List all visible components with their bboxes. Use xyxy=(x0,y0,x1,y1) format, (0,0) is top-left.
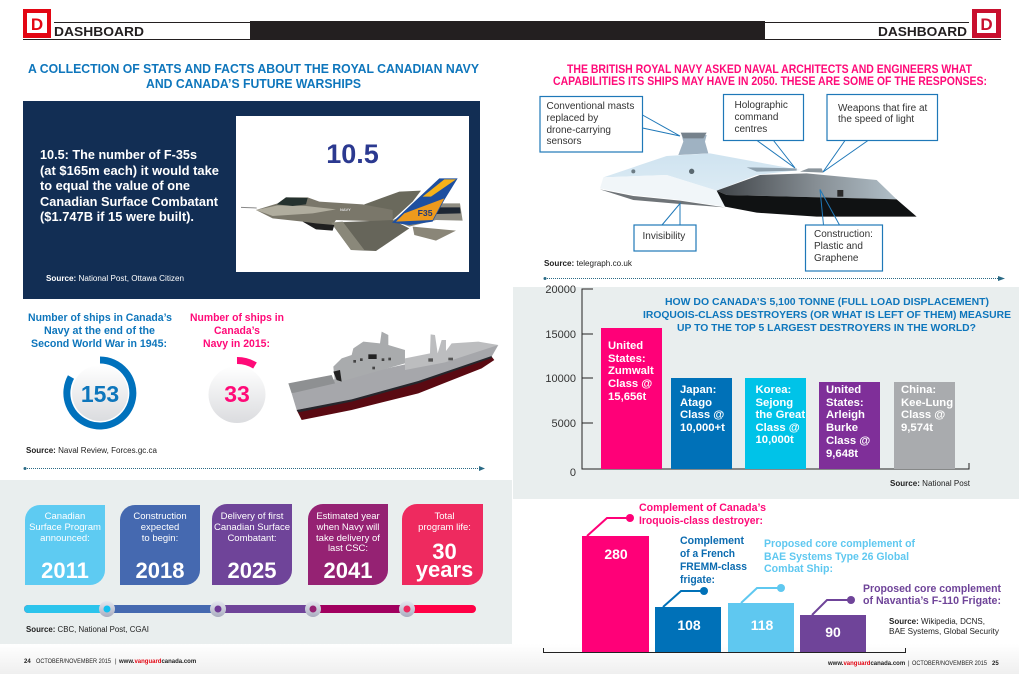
card: 2018 xyxy=(120,505,200,585)
panel: program timeline xyxy=(0,480,512,644)
bar: Atago: Class @ xyxy=(680,409,724,421)
bar: Arleigh Burke: Arleigh xyxy=(826,409,865,421)
callout: weapons: the speed of light xyxy=(838,114,914,125)
card: 30 years: Total xyxy=(434,511,455,522)
chart axes: 5000 xyxy=(552,418,576,430)
bar: Arleigh Burke xyxy=(819,382,880,469)
bar: Zumwalt xyxy=(601,328,662,469)
bar: Type 26 118: Combat Ship: xyxy=(764,563,833,575)
callout: holographic: centres xyxy=(734,124,767,135)
panel: destroyer chart xyxy=(513,284,1019,499)
card: 2011 xyxy=(25,505,105,585)
card: 2041: 2041 xyxy=(324,558,372,583)
arrow: left dotted divider xyxy=(24,466,485,471)
callout: masts: sensors xyxy=(546,136,582,147)
footer right: 25 xyxy=(992,661,999,667)
bar: Iroquois 280: Complement of Canada’s xyxy=(639,502,766,514)
chart heading: UP TO THE TOP 5 LARGEST DESTROYERS IN THE WORLD? xyxy=(677,322,976,334)
callout: weapons xyxy=(823,94,938,172)
bar: Atago: Atago xyxy=(680,397,712,409)
callout: masts: Conventional masts xyxy=(546,101,634,112)
bar: FREMM 108: of a French xyxy=(680,548,735,560)
left header xyxy=(23,9,250,40)
callout: invisibility: Invisibility xyxy=(642,231,685,242)
right title: CAPABILITIES ITS SHIPS MAY HAVE IN 2050. THESE ARE SOME OF THE RESPONSES: xyxy=(553,76,987,88)
card: 2025: 2025 xyxy=(228,558,276,583)
chart heading: IROQUOIS-CLASS DESTROYERS (OR WHAT IS LEFT OF THEM) MEASURE xyxy=(643,309,1011,321)
ring chart 153 xyxy=(67,360,133,426)
dashboard label left: DASHBOARD xyxy=(54,24,144,39)
bar: Sejong: 10,000t xyxy=(756,434,794,446)
footer left: vanguardcanada.com xyxy=(134,659,196,665)
bar: Atago: 10,000+t xyxy=(680,422,725,434)
chart axes: 20000 xyxy=(545,284,576,296)
callout: holographic xyxy=(724,94,804,168)
chart heading: HOW DO CANADA’S 5,100 TONNE (FULL LOAD DISPLACEMENT) xyxy=(665,296,989,308)
bar: Arleigh Burke: States: xyxy=(826,397,864,409)
bar: Atago: Japan: xyxy=(680,384,716,396)
footer left: | xyxy=(115,659,117,665)
icon: naval supply ship xyxy=(288,332,498,420)
bar: Type 26 118: BAE Systems Type 26 Global xyxy=(764,551,909,563)
card: 2011: announced: xyxy=(40,533,90,544)
callout: masts: replaced by xyxy=(546,113,598,124)
source: Source: CBC, National Post, CGAI xyxy=(26,625,149,634)
icon: F-35 jet: NAVY xyxy=(340,207,351,212)
source: Source: Naval Review, Forces.gc.ca xyxy=(26,446,158,455)
card: 2018: to begin: xyxy=(142,533,178,544)
stat heading: Number of ships in xyxy=(190,312,284,324)
icon: F-35 jet xyxy=(241,178,463,251)
footer left: OCTOBER/NOVEMBER 2015 xyxy=(36,659,112,665)
bar: Sejong: Korea: xyxy=(756,384,791,396)
bar: Arleigh Burke: Burke xyxy=(826,422,858,434)
fact text: to equal the value of one xyxy=(40,179,190,193)
card: 2018: expected xyxy=(141,522,179,533)
bar: FREMM 108: FREMM-class xyxy=(680,561,747,573)
baseline axis xyxy=(544,648,906,652)
bar: Zumwalt: Class @ xyxy=(608,378,652,390)
footer left: www. xyxy=(118,659,135,665)
stat heading: Navy at the end of the xyxy=(44,325,155,337)
callout: construction: Plastic and xyxy=(814,241,863,252)
stat heading: Second World War in 1945: xyxy=(31,338,167,350)
source: Source: telegraph.co.uk xyxy=(544,259,633,268)
stat: ships in 2015 xyxy=(190,312,284,423)
bar: Arleigh Burke: United xyxy=(826,384,861,396)
chart axes: 0 xyxy=(570,467,576,479)
black header bar xyxy=(250,21,765,40)
card: 2025: Delivery of first xyxy=(221,511,284,522)
stat heading: Canada’s xyxy=(214,325,260,337)
callout: masts: drone-carrying xyxy=(546,125,611,136)
icon: D logo right: D xyxy=(980,15,993,34)
icon: futuristic warship xyxy=(600,133,917,217)
bar: Type 26 118 xyxy=(728,538,915,652)
right header xyxy=(765,9,1001,40)
chart axes: 10000 xyxy=(545,373,576,385)
fact text xyxy=(40,148,219,224)
source: Source: Wikipedia, DCNS, xyxy=(889,617,985,626)
bar: Sejong: Sejong xyxy=(756,397,793,409)
card: 30 years xyxy=(402,504,483,585)
bar: Iroquois 280: 280 xyxy=(604,546,628,562)
footer right: OCTOBER/NOVEMBER 2015 xyxy=(912,661,988,667)
bar: Atago xyxy=(671,378,732,469)
callout: masts xyxy=(540,96,680,152)
stat heading xyxy=(28,312,172,350)
callout: construction: Graphene xyxy=(814,253,859,264)
bar: F-110 90: of Navantia’s F-110 Frigate: xyxy=(863,595,1001,607)
icon: D logo left: D xyxy=(31,15,43,34)
footer shading xyxy=(0,644,1019,674)
card: 2041 xyxy=(308,504,388,585)
bar: Iroquois 280: Iroquois-class destroyer: xyxy=(639,515,763,527)
bar: Sejong xyxy=(745,378,806,469)
footer right: www.vanguardcanada.com xyxy=(828,661,905,667)
card: 30 years: 30 xyxy=(432,539,457,564)
bar: Type 26 118: 118 xyxy=(751,617,774,633)
bar: Zumwalt: States: xyxy=(608,353,646,365)
bar: F-110 90: Proposed core complement xyxy=(863,583,1001,595)
callout: holographic: Holographic xyxy=(734,100,788,111)
chart heading xyxy=(643,296,1011,334)
bar: Arleigh Burke: Class @ xyxy=(826,435,870,447)
left title: A COLLECTION OF STATS AND FACTS ABOUT THE ROYAL CANADIAN NAVY xyxy=(28,62,480,76)
card: 2018: 2018 xyxy=(136,558,184,583)
bar: Zumwalt: United xyxy=(608,340,643,352)
bar: Type 26 118: Proposed core complement of xyxy=(764,538,915,550)
timeline bar xyxy=(24,601,476,617)
bar: FREMM 108: frigate: xyxy=(680,574,715,586)
stat heading: Number of ships in Canada’s xyxy=(28,312,172,324)
card: 2041: last CSC: xyxy=(328,543,368,554)
card: 2041: take delivery of xyxy=(316,533,380,544)
callout: construction: Construction: xyxy=(814,229,873,240)
card: 2011: Surface Program xyxy=(29,522,101,533)
left title: AND CANADA’S FUTURE WARSHIPS xyxy=(146,77,361,91)
source: BAE Systems, Global Security xyxy=(889,627,999,636)
bar: FREMM 108: 108 xyxy=(677,617,701,633)
bar: Zumwalt: 15,656t xyxy=(608,391,647,403)
callout: weapons: Weapons that fire at xyxy=(838,103,928,114)
ring chart 153: 153 xyxy=(81,381,119,407)
dashboard label right: DASHBOARD xyxy=(878,24,967,39)
bar: F-110 90: 90 xyxy=(825,624,841,640)
fact text: ($1.747B if 15 were built). xyxy=(40,210,194,224)
bar: F-110 90 xyxy=(800,583,1001,652)
source: Source: National Post, Ottawa Citizen xyxy=(46,274,184,283)
source: Source: National Post xyxy=(890,479,971,488)
card: 2041: when Navy will xyxy=(316,522,379,533)
stat: ships in 1945 xyxy=(28,312,172,426)
bar: Sejong: Class @ xyxy=(756,422,800,434)
icon: D logo left xyxy=(23,9,51,38)
card: 2025: Canadian Surface xyxy=(214,522,290,533)
footer left: 24 xyxy=(24,659,31,665)
bar: Sejong: the Great xyxy=(756,409,805,421)
bar: Kee-Lung: China: xyxy=(901,384,936,396)
card: 2041: Estimated year xyxy=(316,511,380,522)
ring chart 33: 33 xyxy=(224,381,250,407)
callout: invisibility xyxy=(634,204,696,251)
bar: Arleigh Burke: 9,648t xyxy=(826,448,858,460)
card: 2025: Combatant: xyxy=(227,533,277,544)
chart axes xyxy=(545,284,969,479)
fact text: (at $165m each) it would take xyxy=(40,164,219,178)
card: 30 years: years xyxy=(416,557,473,582)
card: 2025 xyxy=(212,504,292,585)
stat heading: Navy in 2015: xyxy=(203,338,270,350)
bar: Kee-Lung: 9,574t xyxy=(901,422,933,434)
right title: THE BRITISH ROYAL NAVY ASKED NAVAL ARCHITECTS AND ENGINEERS WHAT xyxy=(567,64,972,76)
right title xyxy=(553,64,987,88)
card: 2018: Construction xyxy=(133,511,187,522)
big number: 10.5 xyxy=(326,139,379,169)
icon: D logo right xyxy=(972,9,1001,38)
callout: construction xyxy=(806,190,882,271)
arrow: right dotted divider xyxy=(544,276,1005,281)
fact text: 10.5: The number of F-35s xyxy=(40,148,197,162)
footer right: | xyxy=(908,661,910,667)
chart axes: 15000 xyxy=(545,329,576,341)
card: 2011: Canadian xyxy=(45,511,85,522)
bar: Kee-Lung: Kee-Lung xyxy=(901,397,953,409)
bar: Zumwalt: Zumwalt xyxy=(608,365,654,377)
bar: FREMM 108: Complement xyxy=(680,535,744,547)
fact text: Canadian Surface Combatant xyxy=(40,195,219,209)
left title xyxy=(28,62,480,91)
card: 2011: 2011 xyxy=(41,558,89,583)
icon: F-35 jet: F35 xyxy=(418,208,433,218)
F-35 image panel xyxy=(236,116,469,272)
chart: ship complement xyxy=(544,502,1001,652)
bar: FREMM 108 xyxy=(655,535,747,652)
card: 30 years: program life: xyxy=(418,522,471,533)
panel: F-35 fact xyxy=(23,101,480,299)
bar: Kee-Lung xyxy=(894,382,955,469)
stat heading xyxy=(190,312,284,350)
callout: holographic: command xyxy=(734,112,778,123)
bar: Kee-Lung: Class @ xyxy=(901,409,945,421)
bar: Iroquois 280 xyxy=(582,502,766,652)
